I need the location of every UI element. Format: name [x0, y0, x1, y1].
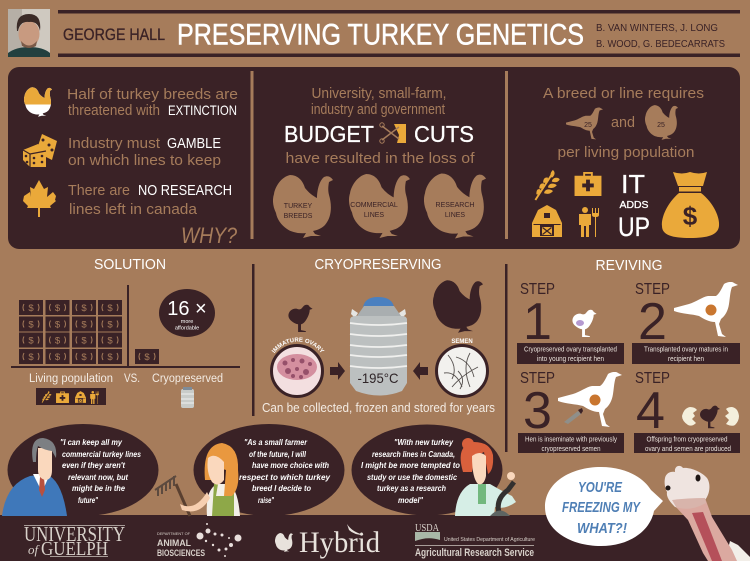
- step 3: STEP: [520, 370, 555, 387]
- heading: solution: SOLUTION: [94, 256, 166, 273]
- icon: money bag: [662, 172, 719, 238]
- panel: solution: [11, 256, 240, 408]
- quote text: turkey as a research: [377, 484, 446, 493]
- panel: reviving: [505, 257, 740, 453]
- text: why: WHY?: [181, 223, 238, 248]
- quote text: commercial turkey lines: [62, 450, 141, 459]
- step 1: 1: [523, 293, 552, 351]
- callout: 16x more affordable: more: [181, 319, 193, 325]
- quote text: research lines in Canada,: [372, 450, 455, 459]
- text: funding intro: industry and government: [311, 102, 445, 118]
- turkey: breeds: BREEDS: [284, 213, 313, 220]
- icon: poult: [288, 305, 313, 332]
- quote text: relevant now, but: [68, 473, 128, 482]
- co-authors: B. VAN WINTERS, J. LONG: [596, 23, 718, 34]
- footer band: [0, 515, 750, 561]
- axis labels: VS.: [124, 373, 140, 385]
- logo: Animal Biosciences: BIOSCIENCES: [157, 548, 205, 558]
- icon: scissors cutting money: [380, 123, 406, 143]
- icon: liquid nitrogen tank: -195°C: [358, 370, 398, 386]
- axis labels: [29, 373, 223, 385]
- axis labels: Cryopreserved: [152, 373, 223, 385]
- icon: 25 toms: 25: [657, 122, 665, 129]
- text: it adds up: [618, 169, 650, 242]
- logo: Hybrid: Hybrid: [299, 526, 380, 559]
- text: it adds up: IT: [621, 169, 645, 199]
- person: farmer with rake: [155, 443, 240, 516]
- text: funding intro: [311, 86, 446, 118]
- logo: USDA ARS: United States Department of Agriculture: [444, 537, 535, 543]
- step 2: [632, 281, 740, 364]
- callout: 16x more affordable: 16 ×: [167, 298, 207, 320]
- text: no research: [68, 182, 232, 218]
- label: semen: SEMEN: [451, 339, 473, 345]
- heading: budget cuts: [284, 121, 474, 147]
- logo: University of Guelph: of: [28, 542, 40, 557]
- quote text: have more choice with: [252, 461, 329, 470]
- co-authors: [596, 23, 725, 50]
- heading: cryopreserving: CRYOPRESERVING: [314, 256, 442, 273]
- icon: storage jar: [181, 387, 194, 408]
- logo: USDA ARS: [415, 522, 535, 559]
- text: no research: NO RESEARCH: [138, 182, 232, 199]
- text: per population: per living population: [558, 144, 694, 161]
- icon: 25 hens: [566, 108, 603, 139]
- logo: Animal Biosciences: DEPARTMENT OF: [157, 531, 191, 536]
- icon: 25 toms: [645, 105, 678, 140]
- step 3: [518, 370, 624, 453]
- quote text: "As a small farmer: [244, 438, 308, 447]
- quote text: study or use the domestic: [367, 473, 457, 482]
- co-authors: B. WOOD, G. BEDECARRATS: [596, 39, 725, 50]
- panel: cryopreserving: [252, 256, 495, 416]
- text: gamble: Industry must: [68, 135, 161, 152]
- logo: University of Guelph: GUELPH: [41, 538, 108, 560]
- step 1: [517, 281, 624, 364]
- quote: industry: [2, 424, 158, 516]
- icon: maple leaf: [23, 180, 56, 217]
- heading: budget cuts: BUDGET: [284, 121, 374, 147]
- turkey: commercial lines: LINES: [364, 212, 384, 219]
- step 4: Offspring from cryopreserved: [646, 436, 728, 444]
- logo: University of Guelph: [24, 522, 125, 560]
- text: extinction: threatened with: [68, 102, 160, 119]
- step 2: STEP: [635, 281, 670, 298]
- quote text: [239, 438, 331, 505]
- step 3: cryopreserved semen: [542, 446, 601, 453]
- text: gamble: on which lines to keep: [68, 152, 221, 169]
- callout: 16x more affordable: [159, 289, 215, 337]
- author photo: [8, 9, 50, 57]
- step 3: 3: [523, 382, 552, 440]
- axis labels: Living population: [29, 373, 113, 385]
- turkey: commercial lines: [349, 174, 410, 238]
- icon: barn: [532, 205, 562, 237]
- turkey: research lines: RESEARCH: [436, 202, 474, 209]
- text: extinction: EXTINCTION: [168, 102, 237, 118]
- turkey photo: [665, 466, 750, 561]
- step 2: 2: [638, 293, 667, 351]
- step 2: recipient hen: [668, 356, 704, 363]
- icon strip: living costs: [36, 388, 106, 405]
- logo: USDA ARS: Agricultural Research Service: [415, 547, 534, 559]
- icon: 25 hens: 25: [584, 122, 592, 129]
- text: requirement: A breed or line requires: [543, 85, 704, 102]
- text: no research: lines left in canada: [69, 201, 198, 218]
- quote: researcher: [352, 424, 516, 516]
- caption: Can be collected, frozen and stored for years: [262, 401, 495, 415]
- label: immature ovary: IMMATURE OVARY: [272, 337, 324, 354]
- arrow: semen to tank: [413, 362, 428, 380]
- header: [8, 9, 740, 57]
- step 4: 4: [636, 382, 665, 440]
- step 1: STEP: [520, 281, 555, 298]
- icon: dice: [23, 134, 57, 167]
- icon: medical kit: [575, 172, 601, 196]
- quote text: [60, 438, 141, 505]
- step 3: Hen is inseminate with previously: [525, 436, 617, 444]
- presenter name: GEORGE HALL: [63, 25, 165, 44]
- text: it adds up: UP: [618, 212, 650, 242]
- quote text: might be in the: [72, 484, 126, 493]
- logo: Animal Biosciences: ANIMAL: [157, 538, 191, 548]
- callout: 16x more affordable: affordable: [175, 326, 199, 332]
- quote text: future": [78, 496, 98, 505]
- text: funding intro: University, small-farm,: [312, 86, 446, 102]
- turkey: research lines: LINES: [445, 212, 465, 219]
- icon: adult turkey: [433, 280, 483, 333]
- text: it adds up: ADDS: [620, 200, 649, 211]
- step 4: [634, 370, 740, 453]
- icon: feed: [535, 170, 560, 200]
- quote text: of the future, I will: [249, 450, 307, 459]
- turkey: research lines: [424, 173, 486, 239]
- quote text: "With new turkey: [394, 438, 453, 447]
- text: and: and: [611, 114, 635, 131]
- icon: money bag: $: [683, 201, 698, 231]
- icon: farmer: [579, 207, 599, 237]
- turkey: breeds: [273, 175, 333, 238]
- speech bubble: FREEZING MY: [562, 499, 642, 516]
- text: loss: have resulted in the loss of: [286, 150, 475, 167]
- step 4: STEP: [635, 370, 670, 387]
- panel: the problem: [8, 67, 740, 249]
- title: PRESERVING TURKEY GENETICS: [177, 18, 584, 52]
- quote text: even if they aren't: [62, 461, 125, 470]
- quote: small farmer: [155, 424, 344, 516]
- chart: cost comparison: [11, 285, 240, 368]
- speech bubble: [545, 467, 663, 546]
- turkey: commercial lines: COMMERCIAL: [350, 202, 398, 209]
- quote text: breed I decide to: [252, 484, 311, 493]
- quote text: raise": [258, 496, 274, 505]
- text: extinction: [67, 86, 238, 119]
- icon: liquid nitrogen tank: [350, 297, 407, 396]
- icon: semen sample: [436, 346, 488, 396]
- quote text: respect to which turkey: [239, 473, 331, 482]
- person: businessman: [2, 438, 67, 516]
- step 1: Cryopreserved ovary transplanted: [524, 346, 617, 354]
- icon: ovary sample: [272, 346, 322, 396]
- logo: Animal Biosciences: [157, 523, 242, 558]
- heading: reviving: REVIVING: [596, 257, 662, 274]
- logo: USDA ARS: USDA: [415, 522, 439, 534]
- step 2: Transplanted ovary matures in: [644, 346, 728, 354]
- speech bubble: WHAT?!: [577, 520, 627, 537]
- person: scientist with microscope: [455, 438, 516, 516]
- text: gamble: [68, 135, 221, 169]
- heading: budget cuts: CUTS: [414, 121, 474, 147]
- text: extinction: Half of turkey breeds are: [67, 86, 238, 103]
- step 1: into young recipient hen: [537, 356, 604, 363]
- quote text: "I can keep all my: [60, 438, 122, 447]
- quote text: I might be more tempted to: [361, 461, 460, 470]
- quote text: [361, 438, 460, 505]
- quote text: model": [398, 496, 423, 505]
- step 4: ovary and semen are produced: [645, 446, 731, 453]
- text: gamble: GAMBLE: [167, 135, 221, 152]
- speech bubble: YOU'RE: [578, 479, 623, 496]
- turkey: breeds: TURKEY: [284, 203, 313, 210]
- icon: half turkey: [24, 87, 52, 117]
- arrow: ovary to tank: [330, 362, 345, 380]
- logo: University of Guelph: UNIVERSITY: [24, 522, 125, 546]
- text: no research: There are: [68, 182, 130, 199]
